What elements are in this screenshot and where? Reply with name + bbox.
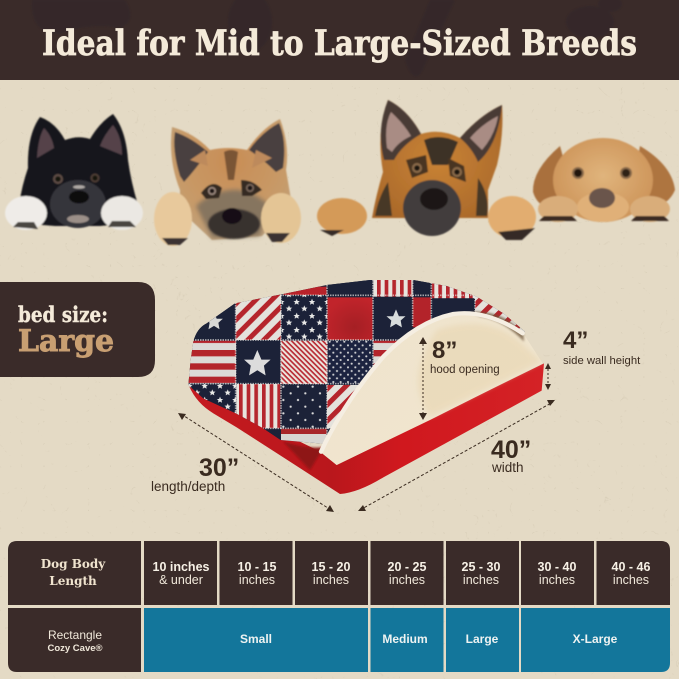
size: large (446, 608, 519, 672)
row label: rectangle cozy cave: Cozy Cave® (47, 643, 103, 654)
size value: Large (18, 324, 114, 359)
column: 30-40 inches: 30 - 40 (538, 560, 577, 574)
column: 10-15 inches: 10 - 15 (238, 560, 277, 574)
size: x-large: X-Large (573, 632, 618, 646)
column: 10 inches and under: & under (159, 573, 203, 587)
dimension: hood opening: 8” (432, 337, 457, 364)
dimension: hood opening: hood opening (430, 364, 500, 376)
column: 15-20 inches: inches (313, 573, 349, 587)
dimension: length: length/depth (151, 479, 225, 494)
dog 4: labrador (533, 138, 675, 222)
column: 25-30 inches: 25 - 30 (462, 560, 501, 574)
column: 15-20 inches: 15 - 20 (312, 560, 351, 574)
header row: dog body length: Length (49, 574, 97, 588)
column: 20-25 inches: inches (389, 573, 425, 587)
dog 3: german shepherd (317, 100, 536, 240)
column: 10 inches and under: 10 inches (153, 560, 210, 574)
dimension: side wall: 4” (563, 327, 588, 354)
dimension: width: 40” (491, 436, 531, 464)
size: medium (370, 608, 444, 672)
column: 40-46 inches: inches (613, 573, 649, 587)
row label: rectangle cozy cave (8, 608, 141, 672)
dogs row (5, 100, 675, 246)
cream hood interior (320, 313, 543, 465)
arrow: length depth (178, 413, 334, 512)
column: 20-25 inches: 20 - 25 (388, 560, 427, 574)
column: 40-46 inches (596, 541, 670, 605)
bed size label: bed size: (18, 302, 108, 327)
stitching (190, 280, 475, 443)
bed size badge (0, 282, 155, 377)
column: 10 inches and under (144, 541, 217, 605)
dimension: length (151, 454, 239, 494)
size: medium: Medium (382, 632, 428, 646)
header banner (0, 0, 679, 80)
arrow: hood opening (419, 337, 427, 420)
dimension: hood opening (430, 337, 500, 376)
red base (189, 363, 544, 494)
dimension: width: width (491, 460, 524, 475)
column: 10-15 inches: inches (239, 573, 275, 587)
header row: dog body length (8, 541, 141, 605)
dog 1: black puppy (5, 114, 143, 230)
bed illustration (183, 277, 544, 494)
dimension: length: 30” (199, 454, 239, 482)
size: small: Small (240, 632, 272, 646)
faint paw and bone watermarks (32, 0, 622, 76)
column: 25-30 inches (446, 541, 519, 605)
column: 25-30 inches: inches (463, 573, 499, 587)
dimension: side wall (563, 327, 641, 367)
header row: dog body length: Dog Body (41, 557, 106, 571)
column: 30-40 inches (521, 541, 594, 605)
column: 40-46 inches: 40 - 46 (612, 560, 651, 574)
size: small (144, 608, 368, 672)
column: 20-25 inches (370, 541, 444, 605)
hood lip (321, 313, 523, 452)
row label: rectangle cozy cave: Rectangle (48, 628, 102, 642)
patchwork fabric (183, 277, 533, 450)
size: large: Large (466, 632, 499, 646)
arrow: side wall height (545, 363, 551, 390)
arrow: width (358, 400, 555, 511)
dimension: side wall: side wall height (563, 355, 641, 367)
column: 15-20 inches (295, 541, 368, 605)
size table (8, 541, 670, 672)
column: 10-15 inches (220, 541, 292, 605)
column: 30-40 inches: inches (539, 573, 575, 587)
dog 2: tan akita (154, 119, 301, 246)
size: x-large (521, 608, 670, 672)
